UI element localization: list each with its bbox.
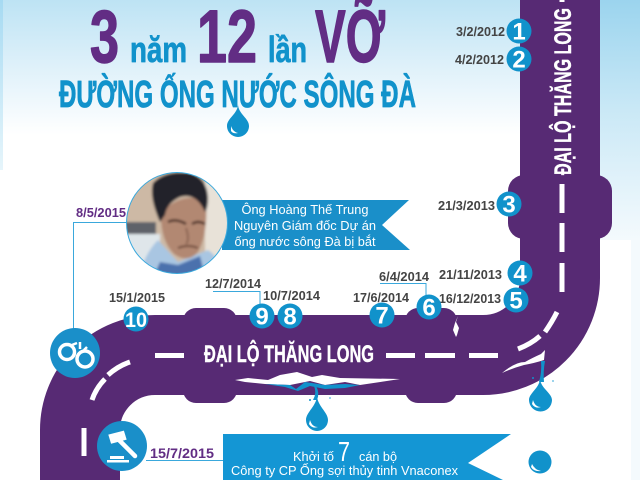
- date: 15/1/2015 marker: 10: [125, 309, 147, 332]
- crack and leak: middle of road: [235, 372, 400, 400]
- title: lần: [268, 29, 307, 70]
- icon: handcuffs: [50, 328, 100, 378]
- date: 21/11/2013 marker: 21/11/2013: [439, 267, 502, 282]
- date: 15/1/2015 marker: 15/1/2015: [109, 290, 165, 305]
- date: 16/12/2013 marker: 16/12/2013: [439, 291, 501, 306]
- date: 10/7/2014 marker: [263, 288, 321, 330]
- title: năm: [130, 29, 187, 70]
- banner: arrest: [222, 200, 410, 250]
- date: 21/3/2013 marker: 21/3/2013: [438, 198, 495, 213]
- date: 16/12/2013 marker: 5: [509, 288, 523, 314]
- date: 4/2/2012 marker: [455, 46, 532, 74]
- icon: water drop bottom right: [528, 450, 552, 474]
- date: 17/6/2014 marker: 17/6/2014: [353, 290, 410, 305]
- icon: gavel: [97, 421, 147, 471]
- date: 17/6/2014 marker: 7: [375, 302, 389, 330]
- date: 15/1/2015 marker: [109, 290, 165, 332]
- road lane dashes: [84, 0, 562, 456]
- banner: arrest: Nguyên Giám đốc Dự án: [234, 218, 376, 233]
- date: 6/4/2014 marker: 6/4/2014: [379, 269, 430, 284]
- date: 21/3/2013 marker: [438, 192, 522, 218]
- date: 16/12/2013 marker: [439, 288, 528, 314]
- crack: flange edge: [453, 316, 459, 337]
- banner: prosecution: Công ty CP Ống sợi thủy tinh Vnaconex: [231, 463, 458, 478]
- banner: prosecution: [223, 434, 511, 480]
- date: 3/2/2012 marker: [456, 18, 532, 46]
- date: 10/7/2014 marker: 8: [283, 304, 297, 330]
- photo: portrait: [126, 172, 228, 274]
- date: 12/7/2014 marker: 12/7/2014: [205, 276, 262, 291]
- title: ĐƯỜNG ỐNG NƯỚC SÔNG ĐÀ: [59, 71, 416, 116]
- date: 4/2/2012 marker: 4/2/2012: [455, 52, 504, 67]
- date: 10/7/2014 marker: 10/7/2014: [263, 288, 321, 303]
- date: 21/3/2013 marker: 3: [502, 192, 516, 218]
- date: 21/11/2013 marker: 4: [513, 260, 527, 288]
- callout: arrest date and connector: [74, 205, 128, 332]
- date: 12/7/2014 marker: 9: [255, 304, 269, 330]
- icon: water drop corner: [529, 377, 554, 412]
- icon: water drop middle: [306, 395, 331, 431]
- banner: prosecution: 7: [338, 436, 350, 467]
- date: 12/7/2014 marker: [205, 276, 274, 330]
- date: 3/2/2012 marker: 3/2/2012: [456, 24, 505, 39]
- callout: arrest date and connector: 8/5/2015: [76, 205, 126, 220]
- banner: arrest: Ông Hoàng Thế Trung: [242, 202, 368, 217]
- banner: prosecution: cán bộ: [359, 449, 397, 464]
- date: 17/6/2014 marker: [353, 290, 410, 330]
- callout: prosecution date and connector: 15/7/2015: [150, 445, 214, 461]
- banner: arrest: ống nước sông Đà bị bắt: [234, 234, 376, 249]
- banner: prosecution: Khởi tố: [293, 449, 334, 464]
- date: 6/4/2014 marker: [379, 269, 442, 322]
- icon: title water drop: [227, 104, 249, 137]
- crack and leak: corner: [502, 350, 545, 382]
- horizontal road label: ĐẠI LỘ THĂNG LONG: [204, 340, 374, 368]
- date: 6/4/2014 marker: 6: [422, 294, 436, 322]
- date: 3/2/2012 marker: 1: [512, 18, 526, 46]
- date: 4/2/2012 marker: 2: [512, 46, 526, 74]
- title: [59, 0, 416, 116]
- date: 21/11/2013 marker: [439, 260, 532, 288]
